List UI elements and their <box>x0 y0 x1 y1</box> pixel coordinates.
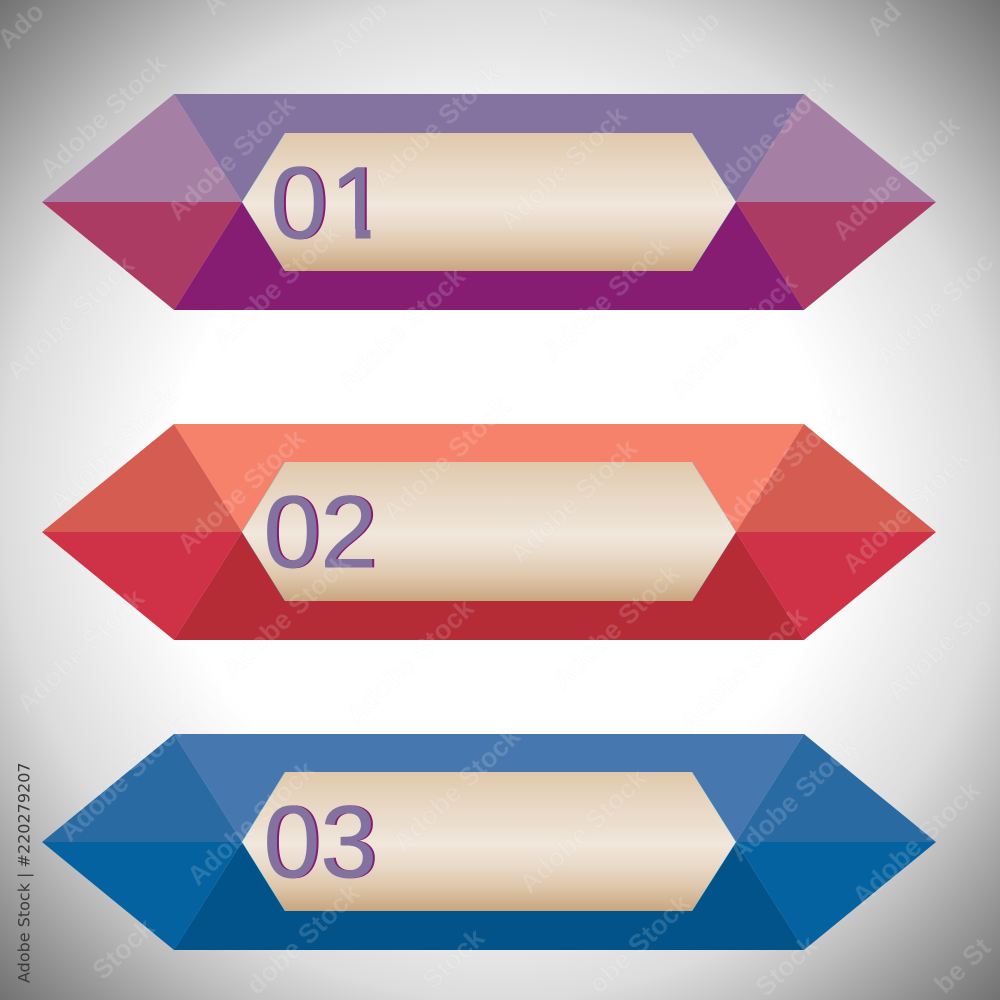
label plate <box>242 462 736 601</box>
stock id label: Adobe Stock | #220279207 <box>14 762 34 983</box>
watermarks: Adobe Stock <box>700 67 841 204</box>
watermarks: Adobe Stock <box>171 422 312 559</box>
watermarks: Adobe Stock <box>503 432 644 569</box>
banner 01 <box>42 94 936 310</box>
watermarks: dobe Stock <box>240 877 367 1000</box>
watermarks: Adobe Stock <box>206 217 347 354</box>
watermarks: Adobe Stock <box>331 260 472 397</box>
label plate <box>242 133 736 271</box>
banner 02 <box>42 424 936 640</box>
watermarks: Adobe Stock <box>43 380 184 517</box>
watermarks: Adobe Sto <box>880 591 998 706</box>
watermarks: Adobe Stock <box>376 390 517 527</box>
watermarks: Adobe Stock <box>493 99 634 236</box>
top band <box>174 94 804 202</box>
label plate <box>242 772 736 911</box>
left wing <box>42 94 242 310</box>
watermarks: Adobe Stock <box>181 754 322 891</box>
watermarks: Adobe Stock <box>33 47 174 184</box>
watermarks: Adobe Stock <box>826 109 967 246</box>
watermarks: Adobe Stoc <box>870 247 999 372</box>
number 02: 02 <box>264 475 377 589</box>
watermarks: be St <box>928 932 997 999</box>
watermarks: Adobe Stock <box>536 229 677 366</box>
watermarks: Adobe Stock <box>0 249 141 386</box>
watermarks: Adobe Stock <box>513 762 654 899</box>
number 03: 03 <box>264 785 377 899</box>
watermarks: Adobe Stock <box>53 710 194 847</box>
banner 03 <box>42 734 936 950</box>
watermarks: Adobe Stock <box>846 774 987 911</box>
watermarks: Adobe Stock <box>723 730 864 867</box>
number 01: 01 <box>270 146 386 260</box>
watermarks: Stock <box>416 922 491 995</box>
watermarks: Adobe Stock <box>340 592 481 729</box>
watermarks: obe Stock <box>582 887 697 999</box>
watermarks: Adobe Stock <box>546 557 687 694</box>
top band <box>174 424 804 532</box>
watermarks: Adobe Stock <box>386 720 527 857</box>
right wing <box>736 734 936 950</box>
bottom band <box>174 202 804 310</box>
watermarks: Adobe Stock <box>161 89 302 226</box>
left wing <box>42 734 242 950</box>
bottom band <box>174 842 804 950</box>
bottom band <box>174 532 804 640</box>
left wing <box>42 424 242 640</box>
right wing <box>736 94 936 310</box>
right wing <box>736 424 936 640</box>
number 02: 02 <box>266 475 379 589</box>
top band <box>174 734 804 842</box>
watermarks: Adobe Stock <box>216 547 357 684</box>
watermarks: Adobe Stock <box>10 582 151 719</box>
number 01 <box>274 166 370 240</box>
number 03: 03 <box>266 785 379 899</box>
watermarks: Adobe Stock <box>663 267 804 404</box>
watermarks: Adob <box>655 5 726 74</box>
watermarks: Adobe Stock <box>366 57 507 194</box>
watermarks: Stock <box>86 912 161 985</box>
watermarks: Adobe Stock <box>673 600 814 737</box>
watermarks: Adobe Stock <box>710 400 851 537</box>
watermarks: Adobe Stock <box>836 442 977 579</box>
number 01: 01 <box>272 146 388 260</box>
